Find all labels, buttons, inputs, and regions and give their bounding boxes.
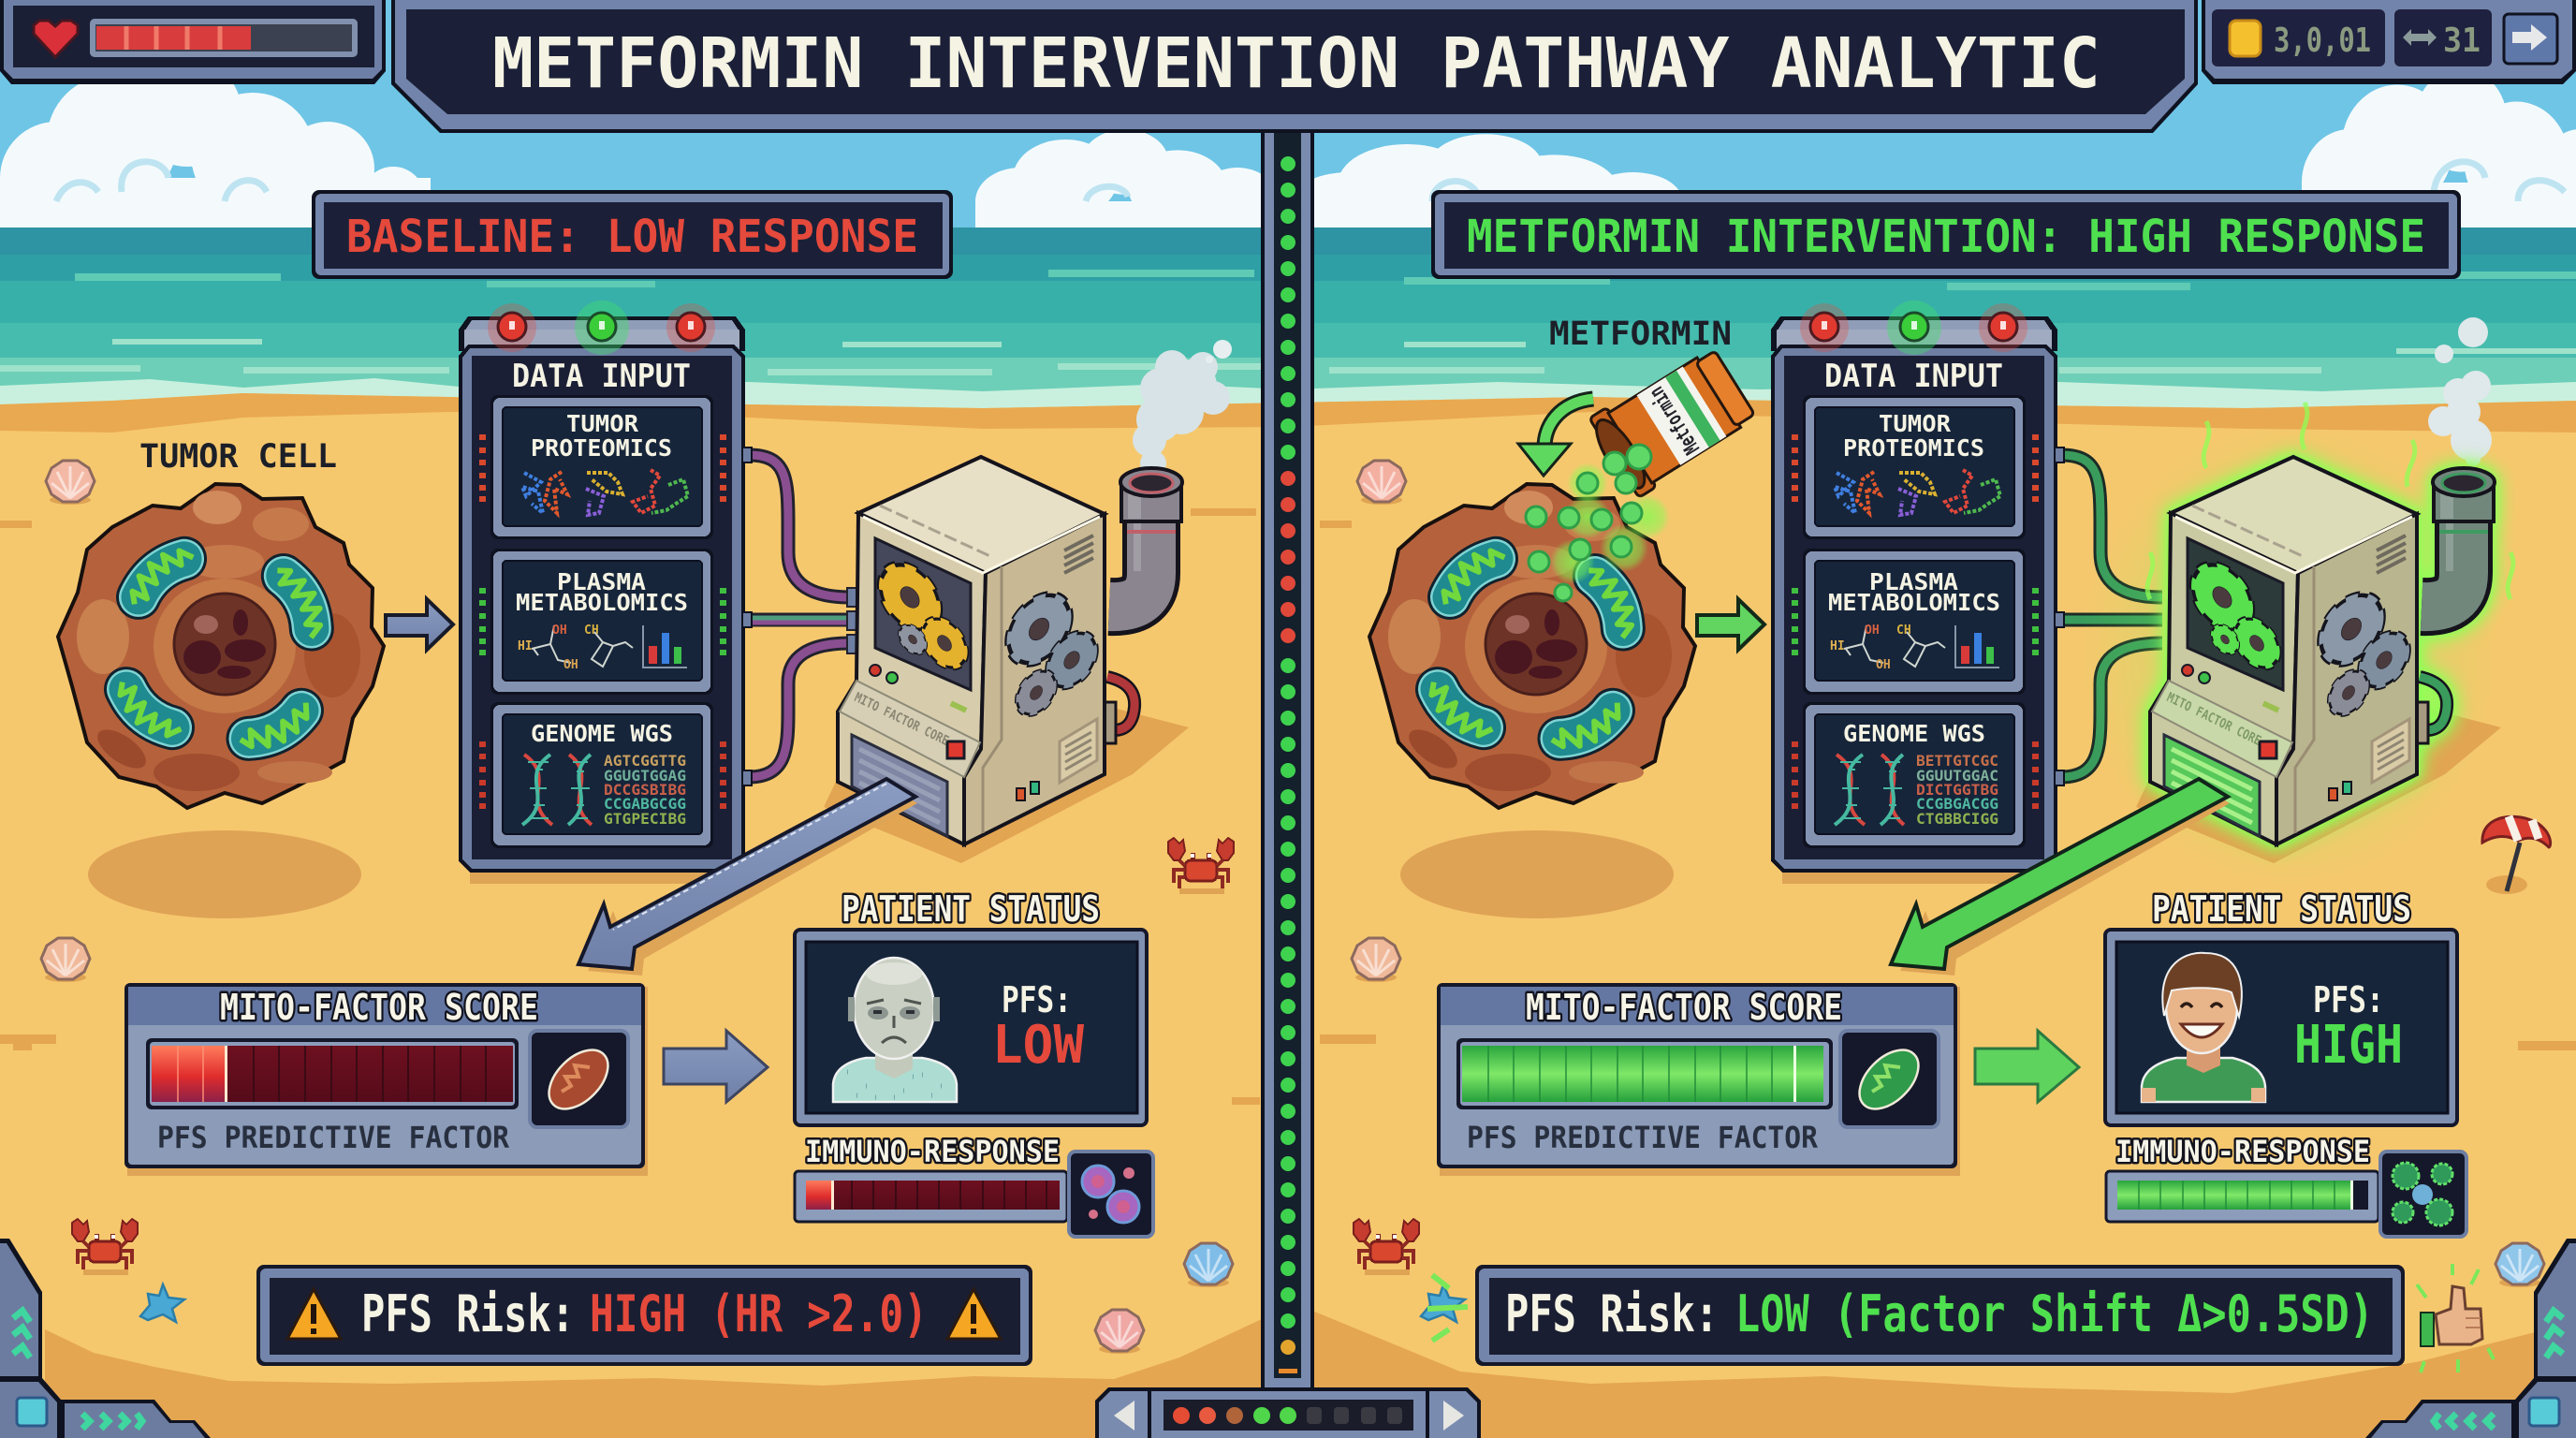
patient: healthy: [2142, 953, 2265, 1102]
sub-panel: genome WGS: [531, 720, 686, 828]
bottom-left corner bezel: [0, 1239, 211, 1438]
big arrow: machine to score: [578, 779, 917, 976]
sub-panel: plasma metabolomics: METABOLOMICS: [1828, 589, 2000, 616]
metformin pill bottle: [1584, 343, 1760, 501]
score bar: low: [146, 1038, 519, 1109]
shell: peach, right lower: [1352, 938, 1400, 982]
sub-panel: plasma metabolomics: CH: [1896, 624, 1911, 638]
sub-panel: plasma metabolomics: METABOLOMICS: [516, 589, 688, 616]
sub-panel: plasma metabolomics: HI: [518, 639, 533, 653]
sub-panel: genome WGS: CCGABGCGG: [604, 795, 686, 813]
sub-panel: genome WGS: GENOME WGS: [1843, 720, 1985, 747]
sub-panel: genome WGS: [1843, 720, 1998, 828]
panel heading: intervention: METFORMIN INTERVENTION: HIGH RESPONSE: [1467, 211, 2425, 263]
processing machine (metformin): [2136, 403, 2513, 863]
callout label: PFS Risk:: [361, 1284, 575, 1343]
PFS readout: PFS:: [2313, 979, 2384, 1020]
score bar: high: [1456, 1038, 1833, 1109]
icon: heart: [34, 21, 78, 57]
sub-panel: tumor proteomics: TUMOR: [1879, 410, 1952, 437]
crab: bottom right panel: [1354, 1219, 1419, 1275]
shell: blue, right bottom: [2496, 1243, 2544, 1287]
shell: pink, left bottom: [1095, 1310, 1144, 1354]
sub-panel: tumor proteomics: TUMOR: [566, 410, 639, 437]
sub-panel: tumor proteomics: [531, 410, 672, 462]
score readout: 3,0,01: [2274, 22, 2371, 60]
sub-panel: genome WGS: GGUGTGGAG: [604, 767, 686, 785]
arrow: score to patient green: [1975, 1031, 2079, 1102]
big arrow: machine to score green: [1891, 779, 2230, 976]
sub-panel: plasma metabolomics: [516, 568, 688, 672]
sand shadow under right tumor cell: [1400, 830, 1674, 918]
machine label: MITO FACTOR CORE: [852, 690, 951, 749]
health bar: [90, 19, 358, 57]
icon: warning: [287, 1289, 341, 1339]
PFS readout: [992, 979, 1084, 1076]
data input panel right: [1771, 301, 2064, 884]
title banner: [391, 0, 2198, 133]
bottle label text: Metformin: [1645, 382, 1705, 458]
callout value: LOW (Factor Shift Δ>0.5SD): [1735, 1284, 2374, 1343]
icon: mitochondrion red: [530, 1031, 628, 1127]
right header: score HUD: [2202, 0, 2576, 84]
arrow: cell to data input, green: [1697, 599, 1764, 650]
beach umbrella: [2482, 816, 2551, 894]
sub-panel: plasma metabolomics: PLASMA: [1869, 568, 1958, 595]
crab: near machine: [1168, 838, 1234, 894]
arrow: score to patient: [664, 1031, 768, 1102]
machine glow: [2078, 421, 2499, 889]
counter readout: [2403, 22, 2481, 60]
sub-panel: genome WGS: DICTGGTBG: [1916, 781, 1998, 799]
title text: METFORMIN INTERVENTION PATHWAY ANALYTIC: [492, 23, 2100, 104]
shell: peach, left lower: [41, 938, 90, 982]
heading: patient status: PATIENT STATUS: [2152, 888, 2411, 930]
counter readout: 31: [2443, 22, 2481, 60]
data input panel: [459, 301, 752, 884]
sub-panel: plasma metabolomics: OH: [552, 624, 567, 638]
icon: coin: [2230, 21, 2261, 56]
panel: mito-factor score right: [1437, 983, 1960, 1176]
sub-panel: genome WGS: BETTGTCGC: [1916, 752, 1998, 770]
sub-panel: plasma metabolomics: OH: [1876, 658, 1891, 672]
sub-panel: plasma metabolomics: [1828, 568, 2000, 672]
heading: MITO-FACTOR SCORE: [220, 987, 538, 1028]
PFS readout: HIGH: [2294, 1015, 2403, 1076]
sub-panel: plasma metabolomics: CH: [584, 624, 599, 638]
starfish: right with sparkle: [1421, 1275, 1468, 1341]
patient: sick: [833, 958, 957, 1102]
tumor cell label: TUMOR CELL: [139, 438, 337, 476]
icon: immune cells low: [1069, 1152, 1153, 1237]
sub-panel: tumor proteomics: PROTEOMICS: [1843, 434, 1984, 462]
icon: thumbs up with sparkles: [2417, 1264, 2494, 1372]
sub-panel: plasma metabolomics: HI: [1830, 639, 1845, 653]
callout: PFS risk high: [256, 1265, 1032, 1366]
heading: MITO-FACTOR SCORE: [1526, 987, 1842, 1028]
caption: PFS PREDICTIVE FACTOR: [1467, 1120, 1819, 1155]
right arrow button: [1443, 1401, 1464, 1431]
metformin label: METFORMIN: [1549, 315, 1732, 353]
sub-panel: genome WGS: CCGBGACGG: [1916, 795, 1998, 813]
heading: patient status: PATIENT STATUS: [842, 888, 1100, 930]
panel: mito-factor score: [124, 983, 648, 1176]
progress LEDs: [1173, 1407, 1402, 1424]
PFS readout: LOW: [992, 1015, 1084, 1076]
icon: warning right: [947, 1289, 1001, 1339]
data input pipes: [749, 455, 856, 777]
sub-panel: genome WGS: DCCGSBIBG: [604, 781, 686, 799]
sub-panel: genome WGS: GENOME WGS: [531, 720, 673, 747]
heading: data input: DATA INPUT: [512, 358, 691, 395]
icon: immune cells high: [2380, 1152, 2466, 1237]
shell: pink, right top: [1357, 461, 1406, 505]
panel heading: baseline: BASELINE: LOW RESPONSE: [346, 211, 918, 263]
tumor cell illustration: [58, 484, 384, 808]
heading: immuno-response: IMMUNO-RESPONSE: [805, 1134, 1060, 1169]
callout value: HIGH (HR >2.0): [590, 1284, 928, 1343]
shell: pink, left top: [46, 461, 95, 505]
PFS readout: [2294, 979, 2403, 1076]
arrow: cell to data input: [386, 599, 453, 650]
sub-panel: tumor proteomics: [1843, 410, 1984, 462]
bottom center control bar: [1095, 1387, 1481, 1438]
sub-panel: genome WGS: AGTCGGTTG: [604, 752, 686, 770]
callout: PFS risk low: [1475, 1265, 2405, 1366]
sub-panel: plasma metabolomics: OH: [564, 658, 578, 672]
processing machine (baseline): [824, 457, 1189, 863]
panel: patient status low: [795, 930, 1147, 1125]
sub-panel: genome WGS: GTGPECIBG: [604, 810, 686, 828]
starfish: left: [140, 1284, 184, 1322]
shell: blue, left bottom: [1184, 1243, 1233, 1287]
panel heading: intervention: [1431, 190, 2461, 279]
next arrow button: [2504, 14, 2557, 64]
sub-panel: plasma metabolomics: OH: [1865, 624, 1880, 638]
sand shadow under left tumor cell: [88, 830, 361, 918]
metformin pills: [1526, 445, 1670, 601]
panel heading: baseline: [312, 190, 953, 279]
smoke plume: [1133, 340, 1232, 477]
left arrow button: [1114, 1401, 1134, 1431]
panel: patient status high: [2105, 930, 2457, 1125]
center divider with signal LEDs: [1261, 133, 1314, 1392]
smoke puffs right: [2428, 317, 2492, 466]
heading: immuno-response: IMMUNO-RESPONSE: [2115, 1134, 2370, 1169]
callout label: PFS Risk:: [1505, 1284, 1719, 1343]
heading: data input: DATA INPUT: [1824, 358, 2003, 395]
arrow: curved green dose: [1518, 399, 1593, 476]
sub-panel: plasma metabolomics: PLASMA: [557, 568, 646, 595]
immuno-response bar: high: [2106, 1171, 2378, 1222]
immuno-response bar: low: [795, 1171, 1067, 1222]
data input pipes green: [2061, 455, 2162, 777]
machine label: MITO FACTOR CORE: [2164, 690, 2263, 749]
icon: mitochondrion green: [1840, 1031, 1939, 1127]
bottom-right corner bezel: [2365, 1239, 2576, 1438]
crab: bottom left: [72, 1219, 138, 1275]
sub-panel: genome WGS: CTGBBCIGG: [1916, 810, 1998, 828]
sub-panel: genome WGS: GGUUTGGAC: [1916, 767, 1998, 785]
left header: health HUD: [0, 0, 386, 84]
PFS readout: PFS:: [1002, 979, 1072, 1020]
sub-panel: tumor proteomics: PROTEOMICS: [531, 434, 672, 462]
tumor cell illustration (treated): [1369, 484, 1695, 808]
caption: PFS PREDICTIVE FACTOR: [157, 1120, 510, 1155]
